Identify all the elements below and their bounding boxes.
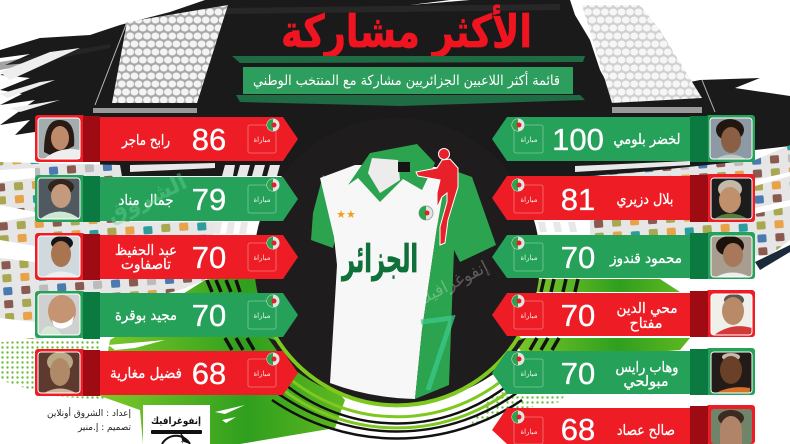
- row left 2: Djamel Menad: 79: [192, 182, 226, 217]
- infographic logo: [143, 405, 210, 444]
- black brush background: [0, 0, 790, 176]
- row right 5: Wahab Raiah Mbolhi: مبولحي: [624, 374, 668, 390]
- photo: [38, 352, 80, 393]
- row right 2: Bilal Dziri: بلال دزيري: [616, 192, 674, 208]
- photo: [711, 294, 752, 335]
- row right 1: Lakhdar Belloumi: مباراة: [520, 136, 538, 144]
- floodlight left: [93, 5, 228, 113]
- row right 5: Wahab Raiah Mbolhi: 70: [561, 356, 595, 391]
- teal watermark seven: [421, 318, 452, 390]
- photo: [38, 178, 80, 219]
- flag badge: [266, 118, 280, 132]
- watermark text over jersey: إنفوغرافيك: [414, 257, 492, 310]
- mosaic pattern right: [590, 145, 790, 258]
- white streaks across mosaic: [0, 168, 790, 338]
- dark brush at right edge: [755, 245, 790, 270]
- row left 4: Madjid Bougherra: مباراة: [254, 312, 271, 320]
- credits: تصميم : إ.منير: [77, 423, 131, 433]
- mosaic pattern left: [0, 162, 215, 340]
- row left 1: Rabah Madjer: [35, 115, 298, 162]
- jersey crest: [419, 206, 433, 220]
- row left 5: Fodil Megharia: 68: [192, 356, 226, 391]
- row right 5: Wahab Raiah Mbolhi: وهاب رايس: [616, 360, 678, 376]
- photo: [38, 294, 80, 335]
- jersey white body: [320, 165, 458, 399]
- row right 2: Bilal Dziri: 81: [561, 182, 595, 217]
- photo: [711, 352, 752, 393]
- row right 4: Mahieddine Meftah: [492, 290, 755, 337]
- row right 2: Bilal Dziri: [492, 174, 755, 222]
- row right 4: Mahieddine Meftah: مباراة: [520, 312, 538, 320]
- flag badge: [512, 236, 524, 250]
- collar: [348, 144, 435, 202]
- flag badge: [266, 352, 280, 366]
- row left 2: Djamel Menad: [35, 175, 298, 222]
- row right 3: Mahmoud Guendouz: 70: [561, 240, 595, 275]
- jersey lettering: الجزائر: [341, 237, 418, 281]
- green paint swoosh: [0, 270, 745, 444]
- row left 3: Abdelhafid Tasfaout: 70: [192, 240, 226, 275]
- neck label: [398, 162, 410, 172]
- credits: [47, 407, 131, 433]
- photo: [711, 409, 752, 444]
- row right 1: Lakhdar Belloumi: لخضر بلومي: [614, 132, 680, 148]
- credits: إعداد : الشروق أونلاين: [47, 407, 131, 419]
- flag badge: [512, 178, 524, 192]
- row left 1: Rabah Madjer: 86: [192, 122, 226, 157]
- row left 5: Fodil Megharia: مباراة: [254, 370, 271, 378]
- row right 4: Mahieddine Meftah: 70: [561, 298, 595, 333]
- jersey: [311, 144, 496, 399]
- row left 3: Abdelhafid Tasfaout: تاصفاوت: [121, 257, 171, 273]
- flag badge: [266, 178, 280, 192]
- neck opening: [368, 158, 400, 193]
- row right 1: Lakhdar Belloumi: [492, 115, 755, 162]
- infographic logo: إنفوغرافيك: [151, 416, 201, 427]
- row right 6: Salah Assad: صالح عصاد: [617, 423, 675, 439]
- row left 4: Madjid Bougherra: 70: [192, 298, 226, 333]
- title: الأكثر مشاركة: [281, 4, 532, 58]
- subtitle banner: قائمة أكثر اللاعبين الجزائريين مشاركة مع المنتخب الوطني: [253, 71, 560, 89]
- row left 3: Abdelhafid Tasfaout: عبد الحفيظ: [115, 243, 177, 259]
- flag badge: [266, 294, 280, 308]
- flag badge: [512, 410, 524, 424]
- flag badge: [512, 352, 524, 366]
- photo: [711, 236, 752, 277]
- row right 4: Mahieddine Meftah: مفتاح: [630, 316, 662, 332]
- row left 3: Abdelhafid Tasfaout: [35, 233, 298, 280]
- left sleeve: [311, 175, 336, 248]
- flag badge: [266, 236, 280, 250]
- photo: [38, 118, 80, 159]
- central black circle with rings: [207, 118, 578, 439]
- row left 4: Madjid Bougherra: مجيد بوقرة: [115, 308, 177, 324]
- photo: [711, 178, 752, 219]
- row right 2: Bilal Dziri: مباراة: [520, 196, 538, 204]
- seat bars between rows: [130, 161, 690, 234]
- row right 1: Lakhdar Belloumi: 100: [552, 122, 604, 157]
- row right 6: Salah Assad: مباراة: [520, 428, 538, 436]
- row right 5: Wahab Raiah Mbolhi: [492, 348, 755, 395]
- watermark left: الشروق: [103, 170, 191, 228]
- row left 5: Fodil Megharia: فضيل مغارية: [110, 366, 182, 382]
- row right 3: Mahmoud Guendouz: محمود قندوز: [609, 251, 682, 267]
- red player silhouette: [416, 148, 458, 245]
- row left 4: Madjid Bougherra: [35, 291, 298, 339]
- subtitle banner: [232, 56, 585, 106]
- flag badge: [512, 294, 524, 308]
- row left 2: Djamel Menad: جمال مناد: [118, 193, 174, 209]
- flag badge: [512, 118, 524, 132]
- floodlight right: [582, 5, 715, 113]
- photo: [710, 118, 752, 159]
- row left 2: Djamel Menad: مباراة: [254, 196, 271, 204]
- row right 4: Mahieddine Meftah: محي الدين: [616, 301, 678, 317]
- row left 5: Fodil Megharia: [35, 349, 298, 396]
- two stars: ★★: [336, 208, 356, 221]
- row left 3: Abdelhafid Tasfaout: مباراة: [254, 254, 271, 262]
- row right 5: Wahab Raiah Mbolhi: مباراة: [520, 370, 538, 378]
- photo: [38, 236, 80, 277]
- row right 3: Mahmoud Guendouz: [492, 232, 755, 279]
- row left 1: Rabah Madjer: رابح ماجر: [121, 133, 170, 149]
- right sleeve and green side: [415, 170, 496, 399]
- row right 6: Salah Assad: [492, 405, 755, 444]
- row right 3: Mahmoud Guendouz: مباراة: [520, 254, 538, 262]
- row left 1: Rabah Madjer: مباراة: [254, 136, 271, 144]
